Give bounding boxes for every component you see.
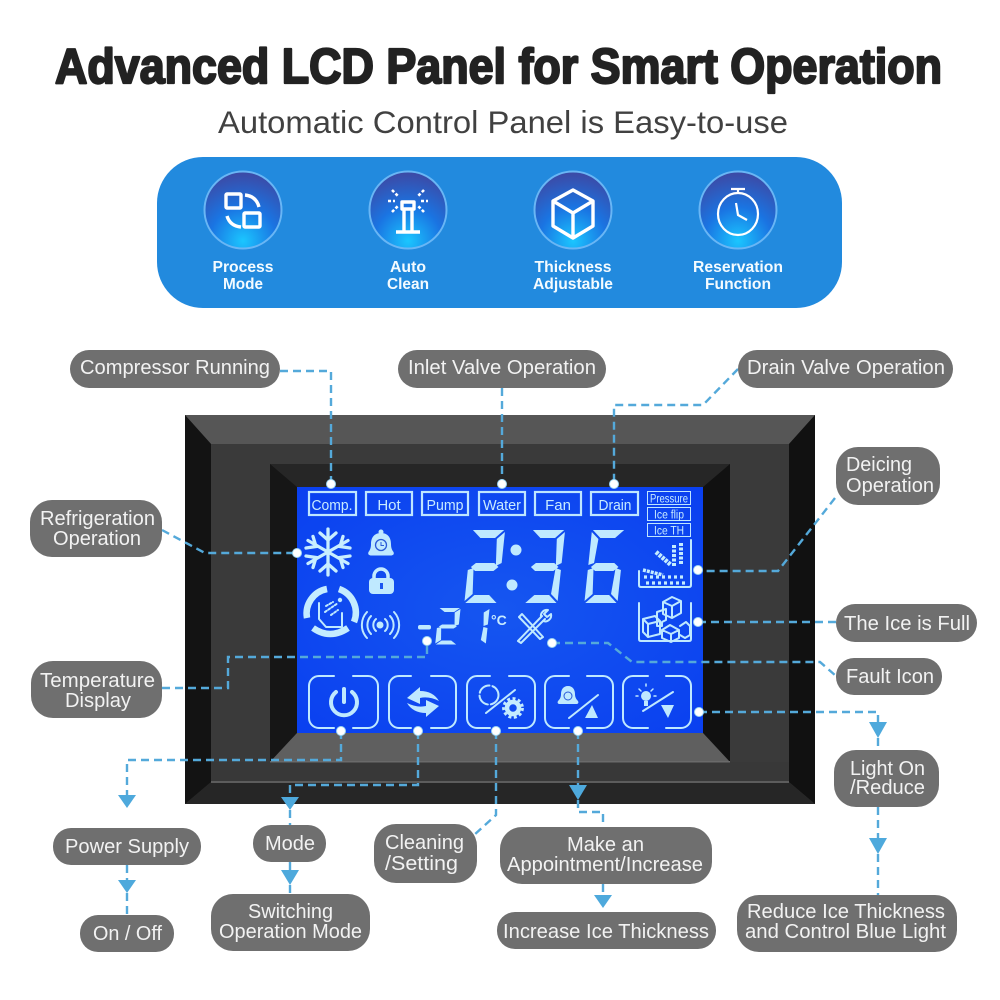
digit 6 (584, 530, 625, 603)
callout: appointment: Make an (567, 834, 644, 856)
leader dots (292, 480, 704, 736)
subtitle: Automatic Control Panel is Easy-to-use (218, 104, 788, 140)
callout: switching: Operation Mode (219, 921, 362, 943)
callout: cleaning (374, 824, 477, 883)
icon: fault tools (518, 610, 551, 643)
callout: ice full (836, 604, 977, 642)
status tags (309, 492, 638, 515)
callout: deicing: Operation (846, 475, 934, 497)
feature: auto clean (370, 172, 446, 293)
icon: water spray cycle (307, 589, 356, 634)
callout: increase thickness (497, 912, 716, 949)
callout: refrigeration (30, 500, 162, 557)
callout: mode: Mode (265, 833, 315, 855)
status tags: Pump (426, 497, 464, 514)
icon: deicing (639, 540, 691, 587)
title: Advanced LCD Panel for Smart Operation (55, 40, 942, 94)
callout: switching: Switching (248, 901, 333, 923)
callout: increase thickness: Increase Ice Thickness (503, 921, 709, 943)
callout: deicing: Deicing (846, 454, 912, 476)
callout: compressor running: Compressor Running (80, 357, 270, 379)
status tags: Fan (545, 497, 571, 514)
small status tags: Ice flip (654, 510, 684, 522)
callout: temperature: Display (65, 690, 131, 712)
callout: refrigeration: Operation (53, 528, 141, 550)
callout: mode (253, 825, 326, 862)
large time display (464, 530, 625, 603)
LCD screen (297, 487, 703, 733)
icon: ice full (639, 597, 691, 642)
callout: appointment (500, 827, 712, 884)
status tags: Hot (377, 497, 402, 514)
small status tags: Pressure (650, 494, 688, 506)
callout: deicing (836, 447, 940, 505)
callout: cleaning: /Setting (385, 853, 458, 875)
callout: reduce thickness: Reduce Ice Thickness (747, 901, 945, 923)
callout: inlet valve: Inlet Valve Operation (408, 357, 596, 379)
icon: wireless signal (362, 612, 399, 638)
callout: temperature: Temperature (40, 670, 155, 692)
callout: light on: Light On (850, 758, 925, 780)
feature: auto clean: Auto (390, 259, 426, 276)
feature: thickness adjustable: Adjustable (533, 276, 613, 293)
callout: on off: On / Off (93, 923, 162, 945)
status tags: Comp. (312, 497, 352, 514)
icon: padlock (369, 569, 394, 594)
icon: snowflake (306, 529, 350, 575)
feature: reservation function: Reservation (693, 259, 783, 276)
callout: ice full: The Ice is Full (844, 613, 970, 635)
callout: appointment: Appointment/Increase (507, 854, 703, 876)
callout: light on (834, 750, 939, 807)
temperature display (418, 608, 507, 644)
feature: reservation function: Function (705, 276, 771, 293)
button: appointment / increase (545, 676, 613, 728)
callout labels (30, 350, 977, 952)
callout: reduce thickness: and Control Blue Light (745, 921, 946, 943)
callout: temperature (31, 661, 162, 718)
colon (506, 544, 522, 590)
feature: thickness adjustable: Thickness (534, 259, 612, 276)
digit 2 (464, 530, 505, 603)
callout: fault icon (836, 658, 942, 695)
callout: drain valve (738, 350, 953, 388)
feature: reservation function (693, 172, 783, 293)
icon: alarm bell (368, 530, 394, 556)
feature: thickness adjustable (533, 172, 613, 293)
feature: process mode (204, 172, 282, 293)
status tags: Drain (598, 497, 632, 514)
button: mode switch (389, 676, 456, 728)
arrowheads (118, 722, 887, 908)
callout: reduce thickness (737, 895, 957, 952)
callout: compressor running (70, 350, 280, 388)
panel: feature banner (157, 157, 842, 308)
callout: inlet valve (398, 350, 606, 388)
small status tags (648, 492, 690, 538)
status tags: Water (483, 497, 521, 514)
callout: refrigeration: Refrigeration (40, 508, 155, 530)
callout: cleaning: Cleaning (385, 832, 464, 854)
callout: drain valve: Drain Valve Operation (747, 357, 945, 379)
leader lines (127, 369, 878, 915)
callout: on off (80, 915, 174, 952)
callout: fault icon: Fault Icon (846, 666, 934, 688)
callout: light on: /Reduce (850, 777, 925, 799)
button: clean / setting (467, 676, 535, 728)
small status tags: Ice TH (654, 526, 684, 538)
panel: LCD control bezel (185, 415, 815, 804)
digit 3 (525, 530, 565, 603)
feature: process mode: Mode (223, 276, 263, 293)
callout: power supply (53, 828, 201, 865)
feature: process mode: Process (212, 259, 274, 276)
feature: auto clean: Clean (387, 276, 429, 293)
button: light / reduce (623, 676, 691, 728)
temperature display: °C (491, 612, 507, 628)
button: power (309, 676, 378, 728)
callout: switching (211, 894, 370, 951)
callout: power supply: Power Supply (65, 836, 189, 858)
